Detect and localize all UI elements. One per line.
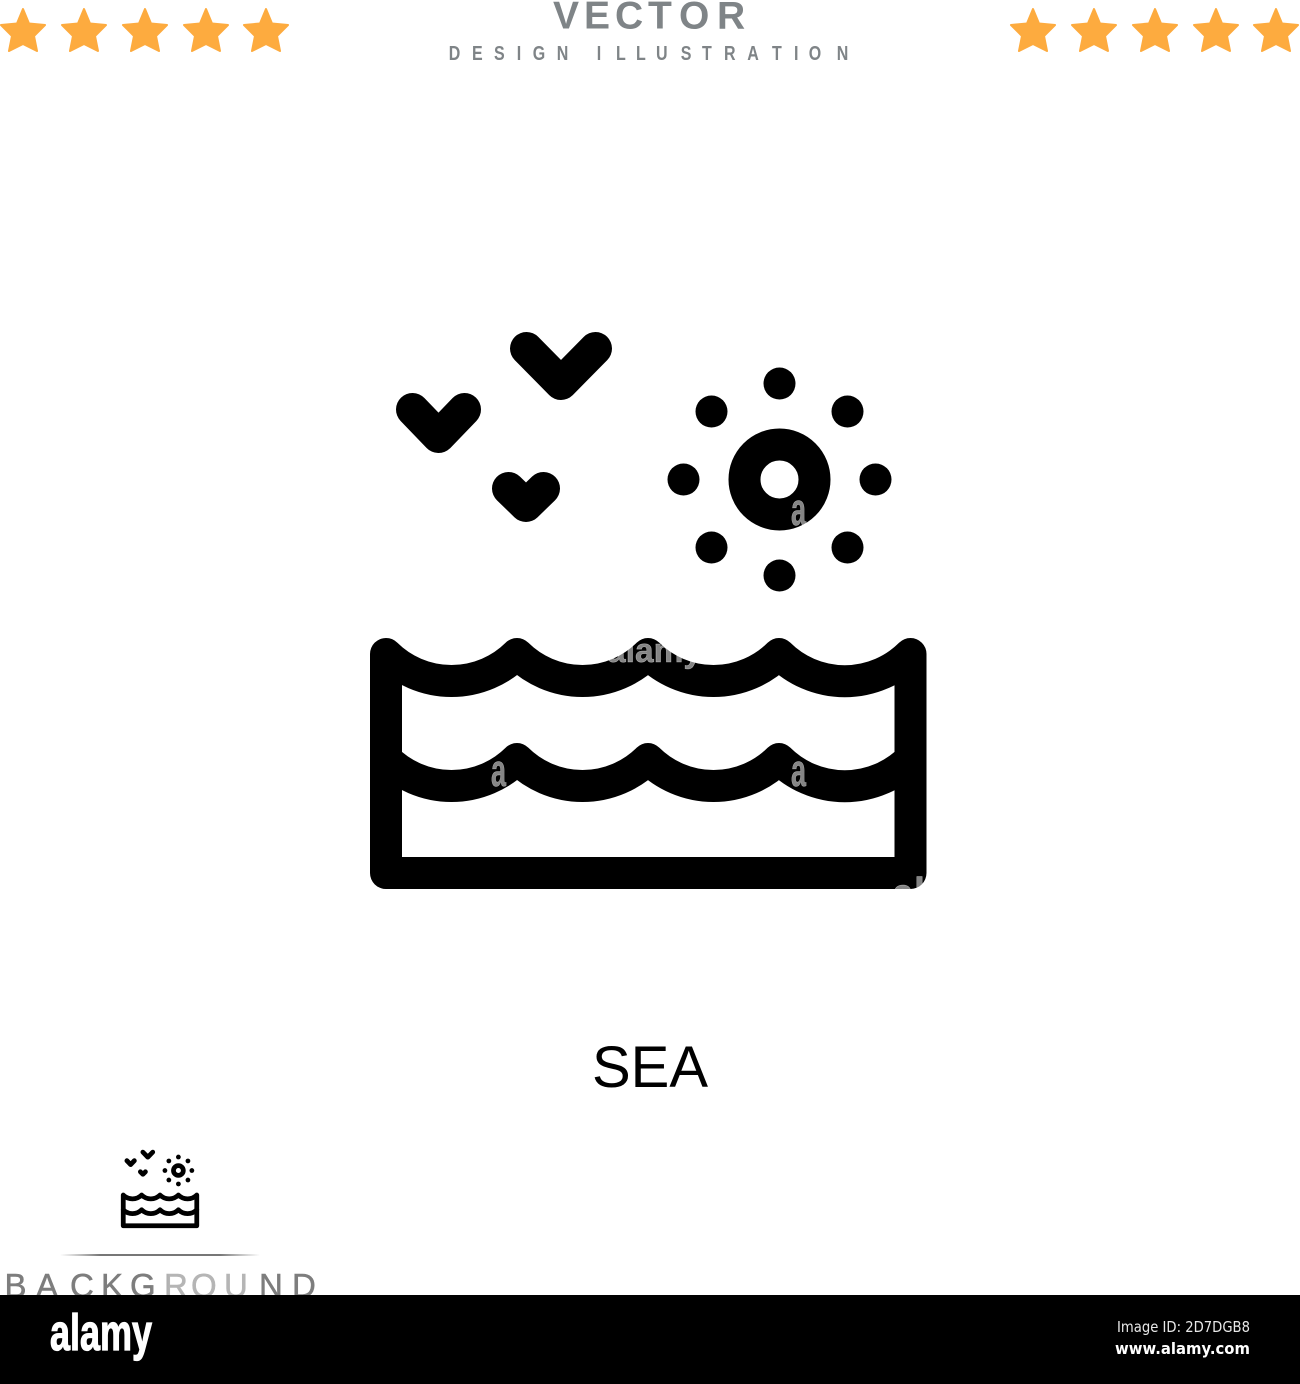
icon: sun xyxy=(668,368,892,592)
label: BACKGROUND: BACKGROUND xyxy=(4,1267,316,1304)
watermark fragments over icon: al xyxy=(892,868,925,920)
watermark fragments over icon: a xyxy=(491,745,507,796)
watermark fragments over icon: a xyxy=(791,745,807,796)
icon title: SEA: SEA xyxy=(592,1035,708,1100)
footer website: www.alamy.com xyxy=(1115,1339,1250,1358)
small icon: sea xyxy=(123,1152,197,1226)
watermark fragments over icon: a xyxy=(791,484,807,535)
footer logo: alamy: alamy xyxy=(50,1304,152,1361)
watermark fragments over icon xyxy=(491,484,925,920)
footer image id: Image ID: 2D7DGB8 xyxy=(1117,1318,1250,1336)
main icon: sea xyxy=(386,348,925,920)
left star rating xyxy=(1,9,288,51)
icon: water tank with waves xyxy=(386,654,910,873)
icon: birds and hearts xyxy=(412,348,596,506)
watermark fragments over icon: alamy xyxy=(607,632,702,670)
footer bar xyxy=(0,1295,1300,1384)
right star rating xyxy=(1011,9,1298,51)
subheading: DESIGN ILLUSTRATION: DESIGN ILLUSTRATION xyxy=(449,42,848,64)
